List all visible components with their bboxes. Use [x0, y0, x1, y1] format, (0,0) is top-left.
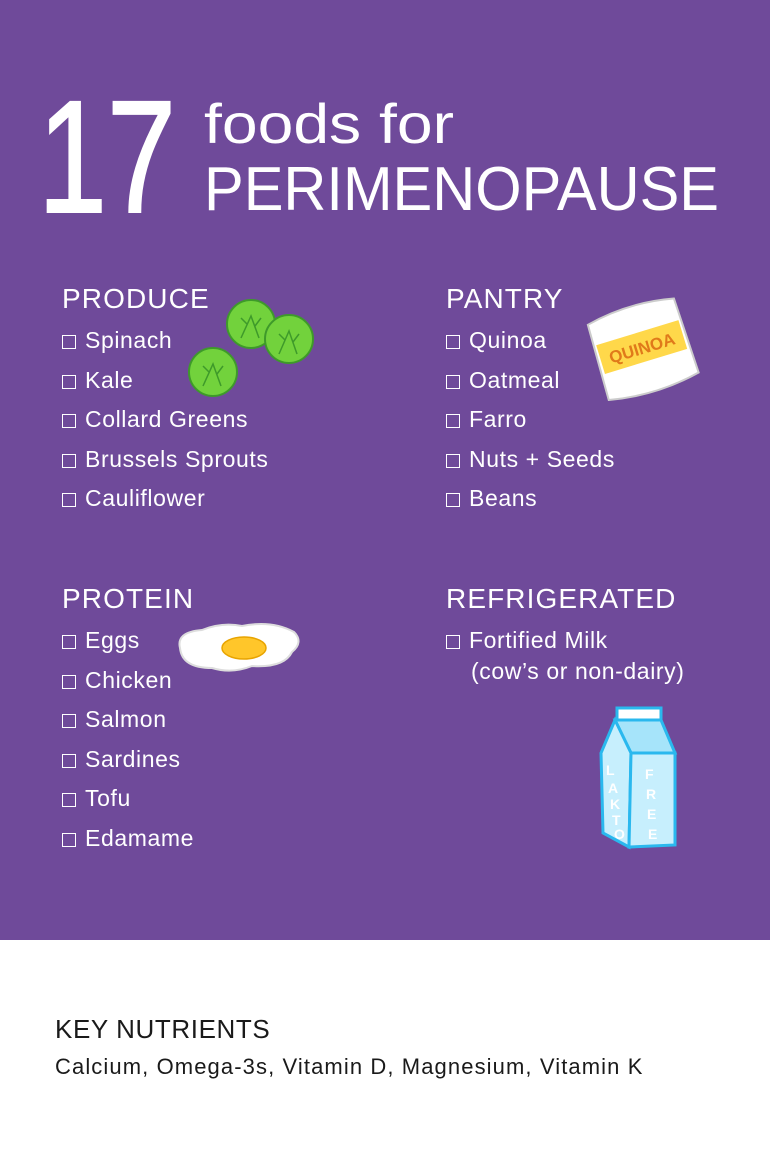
panel: pantry [446, 283, 615, 511]
panel: key nutrients [55, 1014, 644, 1079]
panel: pantry: Beans [469, 485, 537, 511]
icon: milk carton: T [612, 812, 621, 828]
icon: milk carton: A [608, 780, 618, 796]
panel: protein: Sardines [85, 746, 181, 772]
panel: refrigerated: REFRIGERATED [446, 583, 676, 614]
icon: milk carton: E [647, 806, 656, 822]
title: foods for [204, 92, 454, 155]
panel: pantry: Quinoa [469, 327, 547, 353]
panel: protein: Chicken [85, 666, 172, 692]
icon: milk carton: R [646, 786, 656, 802]
panel: protein: Tofu [85, 785, 131, 811]
panel: protein: Eggs [85, 627, 140, 653]
icon: milk carton: F [645, 766, 654, 782]
icon: milk carton: O [614, 826, 625, 842]
panel: pantry: Nuts + Seeds [469, 446, 615, 472]
text: nutrients list: Calcium, Omega-3s, Vitamin D, Magnesium, Vitamin K [55, 1054, 644, 1079]
icon: milk carton: E [648, 826, 657, 842]
panel: refrigerated [446, 583, 685, 684]
panel: protein [62, 583, 194, 850]
panel: produce: PRODUCE [62, 283, 210, 314]
panel: produce: Brussels Sprouts [85, 446, 268, 472]
icon: milk carton [600, 706, 678, 850]
panel: pantry: Farro [469, 406, 527, 432]
heading: key nutrients: KEY NUTRIENTS [55, 1014, 270, 1044]
icon: quinoa bag: QUINOA [607, 329, 677, 368]
panel: produce: Spinach [85, 327, 172, 353]
icon: milk carton: L [606, 762, 615, 778]
panel: protein: Edamame [85, 824, 194, 850]
title [38, 67, 719, 240]
panel: produce [62, 283, 268, 511]
panel: protein: Salmon [85, 706, 167, 732]
panel: produce: Kale [85, 366, 133, 392]
panel: produce: Cauliflower [85, 485, 205, 511]
icon: quinoa bag [586, 298, 700, 401]
panel: produce: Collard Greens [85, 406, 248, 432]
title: PERIMENOPAUSE [204, 155, 719, 224]
panel: refrigerated: Fortified Milk [469, 627, 608, 653]
icon: brussels sprouts [188, 299, 314, 397]
panel: pantry: PANTRY [446, 283, 564, 314]
panel: refrigerated: (cow’s or non-dairy) [471, 658, 685, 684]
panel: protein: PROTEIN [62, 583, 194, 614]
icon: fried egg [178, 623, 300, 672]
panel: pantry: Oatmeal [469, 366, 560, 392]
icon: milk carton: K [610, 796, 620, 812]
